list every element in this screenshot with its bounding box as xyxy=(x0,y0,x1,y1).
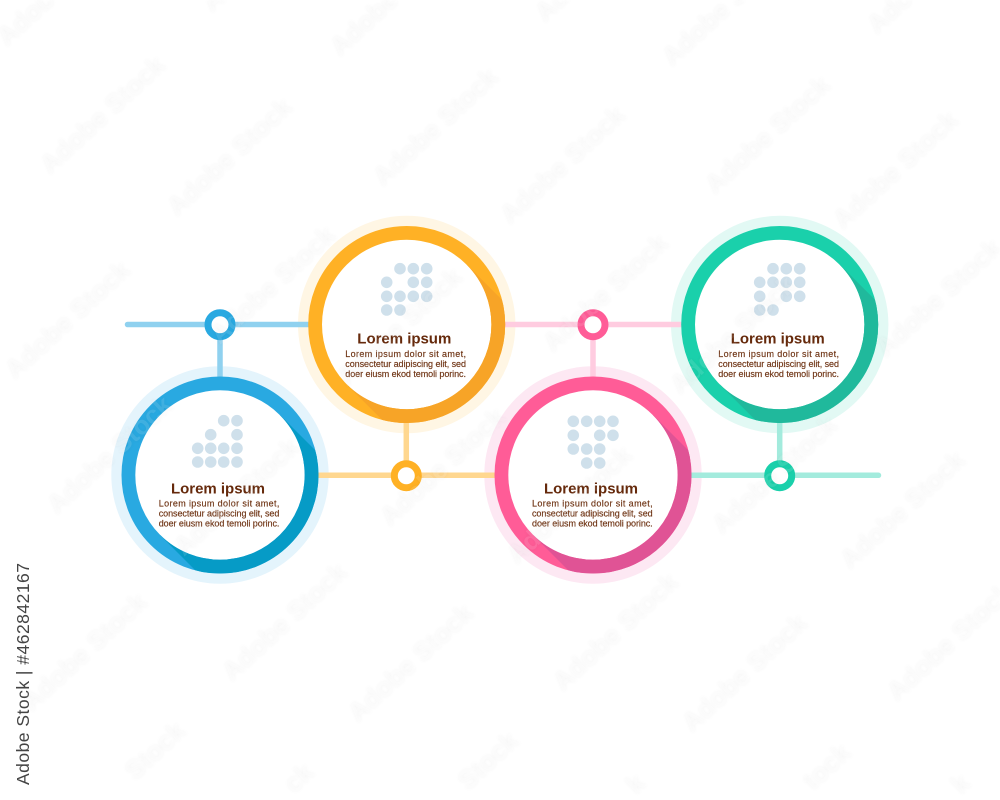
watermark pattern: ck xyxy=(278,756,320,798)
stock credit text: Adobe Stock | #462842167 xyxy=(13,563,33,785)
text block: green step: Lorem ipsum dolor sit amet, xyxy=(718,349,839,359)
panel: green step xyxy=(688,233,871,416)
watermark pattern: Adobe Stock xyxy=(168,431,305,561)
watermark pattern: Adobe Stock xyxy=(331,261,468,391)
text block: green step xyxy=(718,349,839,379)
orange ring xyxy=(315,233,498,416)
text block: orange step xyxy=(345,349,466,379)
text block: blue step: doer eiusm ekod temoli porinc. xyxy=(159,519,279,529)
text block: pink step xyxy=(532,499,653,529)
heading: orange step: Lorem ipsum xyxy=(357,330,451,347)
text block: orange step: Lorem ipsum dolor sit amet, xyxy=(345,349,466,359)
halos behind the circles xyxy=(111,216,888,584)
watermark pattern: Adobe Stock xyxy=(699,69,836,199)
watermark pattern: Adobe Stock xyxy=(34,49,171,179)
watermark pattern: Adobe Stock xyxy=(834,444,971,574)
text block: orange step: consectetur adipiscing elit, sed xyxy=(345,359,466,369)
watermark pattern: Adobe Stock xyxy=(16,586,153,716)
connector: green xyxy=(688,420,878,475)
green ring xyxy=(688,233,871,416)
watermark pattern: Adobe Stock xyxy=(161,91,298,221)
watermark pattern: Adobe Stock xyxy=(664,269,801,399)
text block: blue step: Lorem ipsum dolor sit amet, xyxy=(159,499,279,509)
watermark pattern: k xyxy=(945,767,976,799)
icon: blue dot grid xyxy=(192,415,243,468)
panel: orange step xyxy=(315,233,498,416)
panel: pink step xyxy=(501,383,685,567)
text block: green step: consectetur adipiscing elit, sed xyxy=(718,359,839,369)
connector: pink xyxy=(502,324,685,380)
text block: pink step: Lorem ipsum dolor sit amet, xyxy=(532,499,653,509)
heading: pink step: Lorem ipsum xyxy=(544,480,638,498)
pink ring xyxy=(501,383,685,567)
text block: pink step: doer eiusm ekod temoli porinc. xyxy=(532,519,653,529)
heading: blue step: Lorem ipsum xyxy=(171,480,265,498)
node: blue xyxy=(208,313,232,337)
blue ring xyxy=(128,383,312,567)
icon: green dot grid xyxy=(754,263,806,316)
icon: pink dot grid xyxy=(568,416,619,469)
watermark pattern: Adobe Stock xyxy=(537,227,674,357)
node: pink xyxy=(581,313,605,337)
watermark pattern: Stock xyxy=(452,725,524,795)
watermark pattern: k xyxy=(620,767,651,799)
watermark pattern: Adobe Stock xyxy=(216,556,353,686)
watermark pattern: Adobe Stock xyxy=(547,566,684,696)
watermark pattern: Adobe Stock xyxy=(342,597,479,727)
watermark pattern: Adobe Stock xyxy=(374,401,511,531)
connector: orange xyxy=(315,420,498,475)
text block: blue step: consectetur adipiscing elit, sed xyxy=(159,509,279,519)
watermark pattern: Adobe Stock xyxy=(494,99,631,229)
watermark pattern: Adobe Stock xyxy=(706,409,843,539)
watermark pattern: Stock xyxy=(119,715,191,785)
text block: green step: doer eiusm ekod temoli porinc. xyxy=(718,369,839,379)
watermark pattern: Adobe Stock xyxy=(367,61,504,191)
text block: pink step: consectetur adipiscing elit, sed xyxy=(532,509,653,519)
icon: orange dot grid xyxy=(381,263,433,316)
connector: blue xyxy=(128,324,312,380)
panel: blue step xyxy=(128,383,312,567)
watermark pattern: Adobe Stock xyxy=(0,254,136,384)
watermark pattern: tock xyxy=(797,737,857,795)
node: green xyxy=(768,464,792,488)
heading: green step: Lorem ipsum xyxy=(731,330,825,347)
node: orange xyxy=(394,464,418,488)
watermark pattern: Adobe Stock xyxy=(41,389,178,519)
watermark pattern: Adobe Stock xyxy=(676,607,813,737)
text block: orange step: doer eiusm ekod temoli porinc. xyxy=(345,369,466,379)
watermark pattern: Adobe Stock xyxy=(501,439,638,569)
watermark pattern: Adobe Stock xyxy=(204,219,341,349)
watermark pattern: Adobe Stock xyxy=(827,104,964,234)
text block: blue step xyxy=(159,499,279,529)
